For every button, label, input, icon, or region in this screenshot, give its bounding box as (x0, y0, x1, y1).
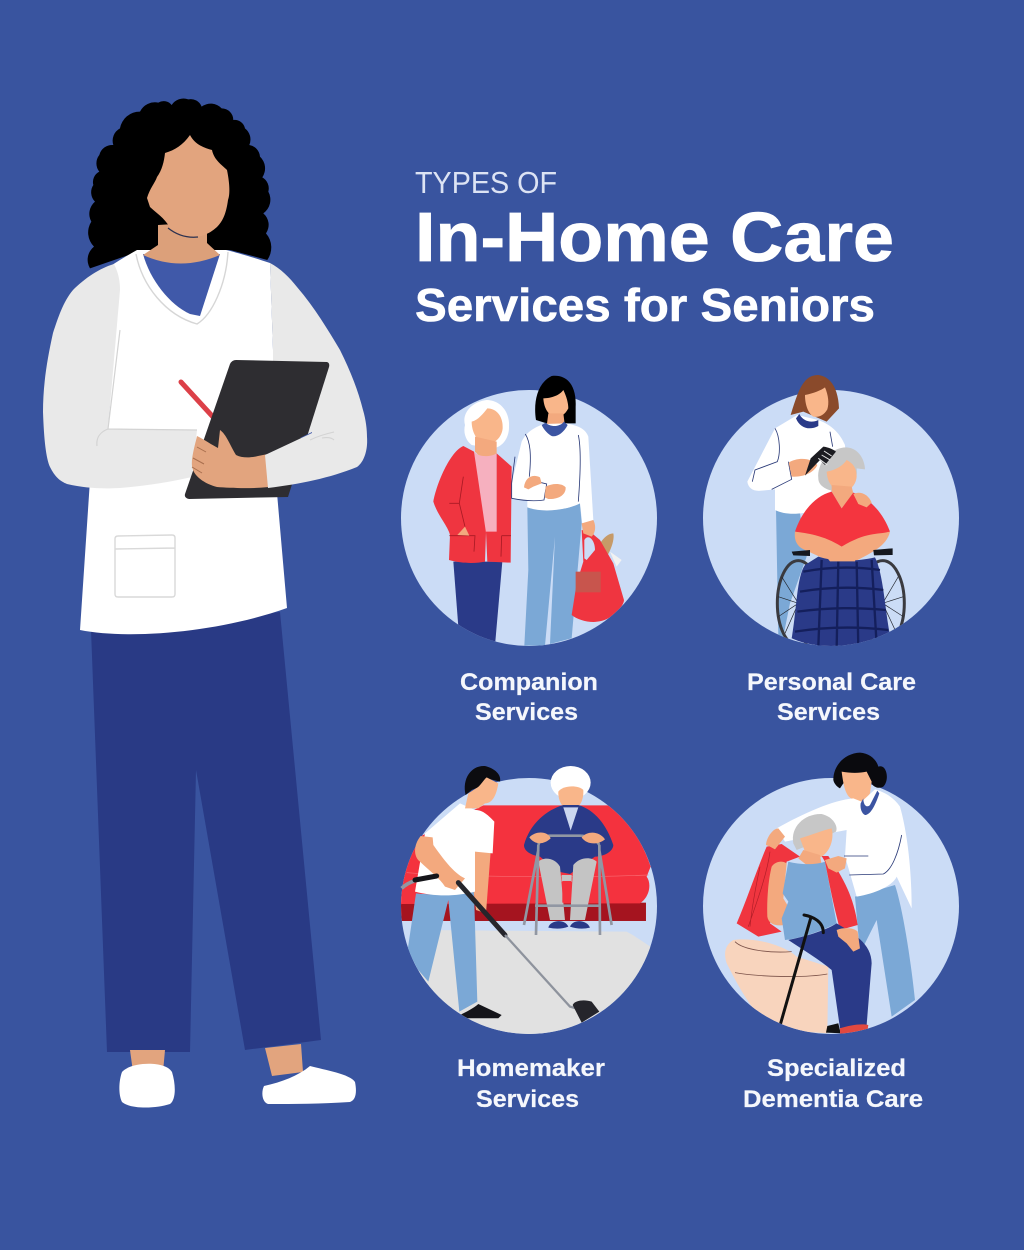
senior shoes (826, 1023, 841, 1033)
companion face (543, 390, 568, 417)
vacuum hose (402, 876, 437, 888)
senior legs (538, 858, 597, 920)
man shoe (460, 1004, 502, 1018)
senior face (472, 408, 503, 444)
circle background (703, 390, 959, 646)
title (415, 165, 894, 331)
man back arm (473, 850, 491, 913)
blanket plaid lines (795, 560, 888, 648)
label: homemaker services (457, 1055, 605, 1113)
nurse fingers (192, 447, 206, 473)
jacket front sleeve (822, 856, 858, 930)
caregiver hand on collar (825, 856, 847, 873)
senior hair (793, 814, 837, 850)
senior hand on knee (837, 928, 860, 952)
nurse figure (43, 98, 367, 1108)
senior trousers (453, 562, 502, 642)
senior face (558, 786, 583, 810)
label: personal care services: Services (777, 699, 880, 726)
caregiver face (842, 772, 872, 805)
label: homemaker services: Services (476, 1086, 579, 1113)
illustration: senior and companion (433, 376, 624, 646)
circle background (401, 390, 657, 646)
bag handle hole (584, 537, 595, 560)
senior neck (475, 437, 497, 458)
label: personal care services (747, 669, 916, 726)
vacuum handle (415, 876, 437, 880)
walker frame (524, 836, 612, 935)
man t-shirt (415, 803, 494, 895)
tunic pocket (115, 535, 175, 597)
panel: companion services (401, 376, 657, 726)
caregiver hand (789, 459, 817, 477)
senior hand in pocket (457, 527, 469, 536)
label: homemaker services: Homemaker (457, 1055, 605, 1082)
senior hand on arm (524, 476, 542, 489)
title line: services for seniors: Services for Seniors (415, 279, 875, 331)
red jacket back (737, 844, 800, 937)
nurse left sleeve (43, 264, 197, 488)
circle background (703, 778, 959, 1034)
caregiver sweater (747, 415, 847, 514)
senior cardigan (524, 805, 613, 874)
vacuum nozzle (573, 1000, 599, 1023)
senior blouse (563, 807, 578, 831)
senior pink top (474, 452, 497, 533)
infographic canvas (43, 98, 959, 1108)
senior face (800, 828, 832, 858)
nurse clipboard (185, 360, 329, 499)
companion bag hand (582, 520, 595, 537)
right cuff fold (310, 432, 334, 440)
senior top (782, 862, 837, 940)
companion sweater (512, 423, 593, 524)
label: companion services: Services (475, 699, 578, 726)
label: companion services (460, 669, 598, 726)
comb (805, 447, 836, 476)
senior raised arm (767, 862, 788, 925)
man head (465, 777, 498, 808)
wheel spokes (778, 577, 903, 633)
shopping bag (572, 530, 624, 622)
sofa gap (562, 875, 572, 882)
senior trousers (788, 923, 872, 1028)
caregiver top (777, 789, 912, 908)
nurse tunic (80, 250, 287, 634)
senior hair (551, 766, 591, 799)
sweater seams (512, 434, 580, 502)
ottoman (725, 939, 828, 1033)
caregiver trousers (776, 508, 807, 637)
nurse collar line (136, 252, 228, 324)
label: companion services: Companion (460, 669, 598, 696)
nurse sleeve fold (97, 330, 197, 446)
senior hair (464, 400, 509, 448)
senior face (826, 460, 857, 488)
nurse neck (143, 222, 220, 264)
wheel right (870, 559, 906, 640)
nurse ankles (130, 1044, 303, 1076)
circle background (401, 778, 657, 1034)
caregiver sleeve lines (844, 835, 902, 875)
floor (400, 930, 667, 1040)
senior hands (529, 833, 605, 843)
label: personal care services: Personal Care (747, 669, 916, 696)
companion jeans (524, 503, 582, 646)
caregiver face (805, 387, 828, 417)
senior shoes (548, 921, 590, 929)
bag print (576, 572, 601, 592)
nurse trousers (91, 612, 321, 1052)
sofa base (400, 903, 646, 921)
nurse face (147, 135, 229, 237)
man front arm (415, 836, 465, 890)
nurse undershirt (143, 254, 220, 316)
jacket fold lines (748, 852, 770, 927)
caregiver hand on shoulder (766, 828, 785, 849)
cane (781, 915, 823, 1023)
nurse chin line (168, 228, 198, 237)
armrests (792, 548, 893, 556)
sweater seams (752, 428, 833, 489)
illustration: man vacuuming and senior with walker (402, 766, 613, 1023)
senior hair (818, 447, 865, 492)
nurse right sleeve (270, 263, 367, 460)
panel: specialized dementia care (703, 753, 959, 1113)
man trousers (407, 892, 477, 1012)
panel: personal care services (703, 375, 959, 726)
vacuum pole (505, 935, 582, 1010)
label: specialized dementia care (743, 1055, 923, 1113)
senior cardigan (433, 446, 512, 563)
room: floor and sofa (400, 805, 667, 1040)
title line: types of: TYPES OF (415, 165, 557, 200)
nurse hand (192, 430, 269, 488)
companion neck (547, 413, 564, 424)
caregiver collar (796, 414, 818, 428)
paper tag (610, 552, 622, 567)
comb teeth (818, 451, 832, 465)
companion hair (535, 376, 576, 423)
plaid blanket (792, 557, 890, 647)
vacuum grip (458, 883, 505, 935)
sofa cushion line (407, 873, 648, 877)
folded hands (825, 548, 855, 561)
caregiver collar (861, 791, 879, 815)
title line: in-home care: In-Home Care (415, 198, 894, 276)
sofa body (400, 805, 651, 904)
senior neck (832, 485, 853, 508)
wheel left (776, 559, 808, 644)
nurse right cuff (265, 433, 367, 488)
cardigan lines (449, 477, 511, 557)
senior neck (798, 850, 822, 865)
label: specialized dementia care: Dementia Care (743, 1086, 923, 1113)
nurse shoes (119, 1064, 356, 1108)
nurse pencil (181, 382, 214, 418)
clipboard cuff accent (300, 432, 312, 438)
senior shirt (795, 492, 890, 547)
label: specialized dementia care: Specialized (767, 1055, 906, 1082)
companion collar (542, 422, 568, 436)
caregiver hair (791, 375, 839, 422)
illustration: caregiver with jacket and senior with cane (725, 753, 915, 1037)
nurse hair (88, 98, 271, 268)
panel: homemaker services (400, 766, 667, 1113)
man hair (465, 766, 500, 795)
caregiver hair (833, 753, 887, 788)
senior arms (795, 532, 890, 561)
companion hand (545, 484, 566, 499)
bread in bag (601, 533, 614, 554)
caregiver trousers (855, 885, 915, 1017)
caregiver hand on shoulder (853, 493, 872, 507)
illustration: caregiver combing hair (747, 375, 904, 648)
ottoman lines (735, 942, 827, 977)
